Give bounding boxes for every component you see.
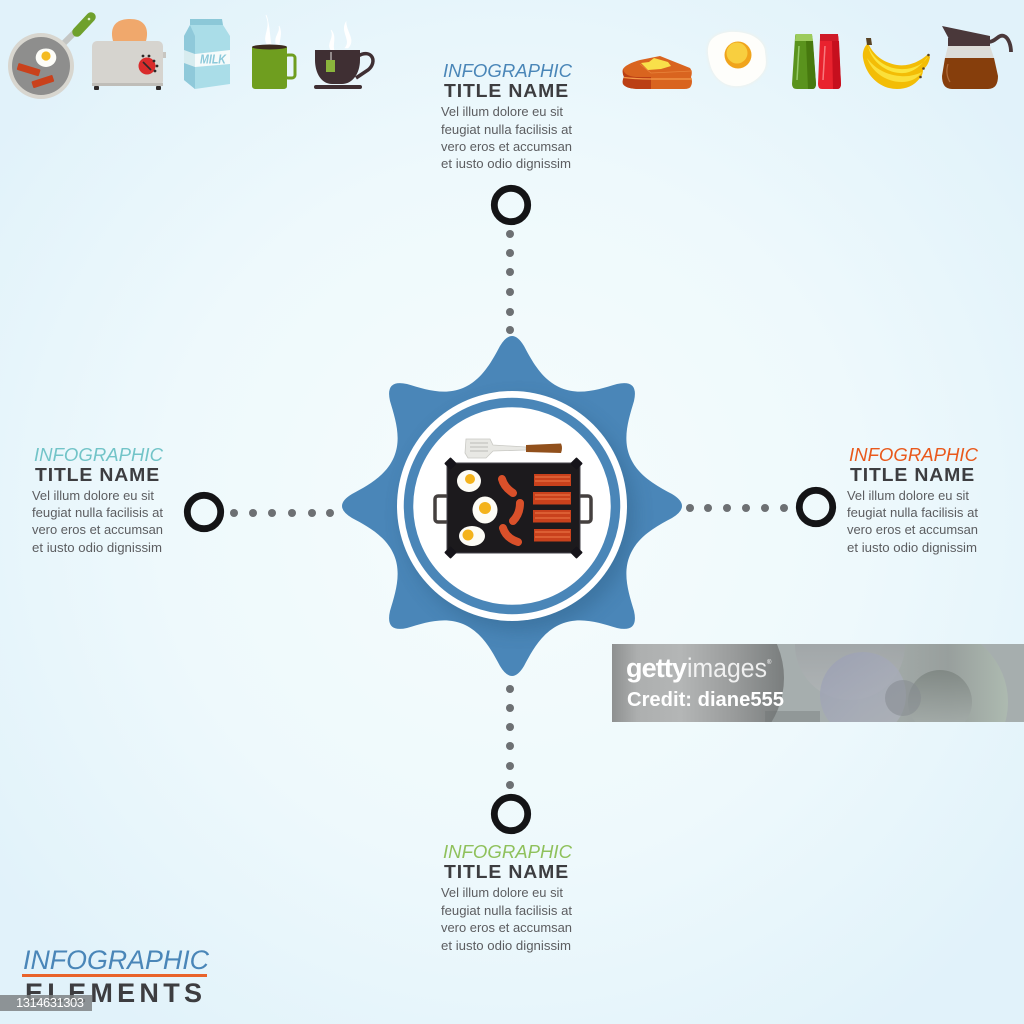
text block: left: vero eros et accumsan [32,522,163,537]
central star badge [342,336,682,676]
watermark panel: Credit: diane555 [627,689,784,711]
icon: milk carton [184,19,230,89]
footer title: ELEMENTS [25,978,202,1008]
connector: left [187,495,334,529]
text block: top: Vel illum dolore eu sit [441,104,563,119]
text block: left: et iusto odio dignissim [32,540,162,555]
icon: spatula [465,439,562,458]
footer title: INFOGRAPHIC [23,945,209,975]
icon: frying pan with egg and bacon [8,17,91,99]
connector: top [494,188,528,334]
icon: fried egg [707,31,767,87]
text block: right: INFOGRAPHIC [849,444,979,465]
text block: bottom: feugiat nulla facilisis at [441,903,572,918]
eggs [457,470,498,546]
text block: right [847,444,979,555]
text block: left: INFOGRAPHIC [34,444,164,465]
icon: coffee mug [252,15,295,89]
watermark panel: images [687,653,767,683]
text block: bottom [441,841,573,953]
text block: top: feugiat nulla facilisis at [441,122,572,137]
icon: griddle with breakfast [435,457,591,559]
watermark panel: ® [767,659,772,666]
text block: left: TITLE NAME [35,465,160,485]
icon: bananas [863,38,930,89]
text block: left: Vel illum dolore eu sit [32,488,154,503]
text block: right: Vel illum dolore eu sit [847,488,969,503]
text block: top [441,60,573,171]
text block: left: feugiat nulla facilisis at [32,505,163,520]
icon: milk carton: MILK [200,52,227,66]
text block: bottom: TITLE NAME [444,862,569,882]
connector: bottom [494,685,528,831]
text block: right: feugiat nulla facilisis at [847,505,978,520]
text block: left [32,444,164,555]
connector: right [686,490,833,524]
text block: top: et iusto odio dignissim [441,156,571,171]
icon: toaster [92,19,166,90]
footer title [22,945,209,1008]
text block: top: vero eros et accumsan [441,139,572,154]
text block: right: et iusto odio dignissim [847,540,977,555]
text block: top: INFOGRAPHIC [443,60,573,81]
image id tag: 1314631303 [16,995,84,1010]
sausages [502,479,520,542]
icon: salt and pepper shakers [792,34,841,89]
text block: top: TITLE NAME [444,81,569,101]
text block: bottom: vero eros et accumsan [441,920,572,935]
text block: bottom: Vel illum dolore eu sit [441,885,563,900]
watermark panel [612,644,1024,722]
text block: right: vero eros et accumsan [847,522,978,537]
text block: bottom: INFOGRAPHIC [443,841,573,862]
bacon strips [533,474,571,542]
icon: french toast stack [623,56,692,89]
text block: bottom: et iusto odio dignissim [441,938,571,953]
icon: coffee pot [942,26,1011,89]
icon: tea cup [314,22,373,89]
text block: right: TITLE NAME [850,465,975,485]
image id tag [0,995,92,1011]
watermark panel: getty [626,653,687,683]
